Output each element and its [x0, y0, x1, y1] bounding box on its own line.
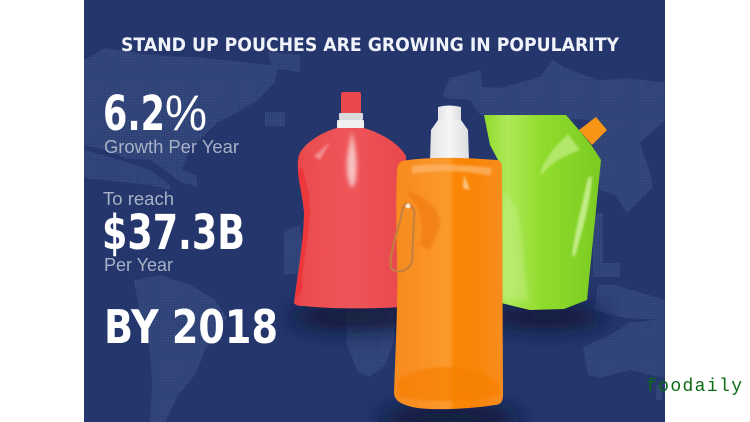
stat: growth per year: 6.2	[103, 86, 165, 142]
icon: green pouch	[484, 115, 607, 310]
icon: orange pouch with carabiner	[391, 106, 503, 409]
stat: market value	[102, 189, 245, 275]
title: STAND UP POUCHES ARE GROWING IN POPULARITY	[121, 35, 620, 56]
stat: growth per year	[103, 85, 239, 157]
stat: market value: $37.3B	[102, 205, 245, 261]
stat: target year: BY 2018	[104, 300, 278, 354]
stat: market value: To reach	[103, 189, 174, 209]
icon: red pouch	[294, 92, 406, 308]
stat: growth per year: %	[165, 85, 207, 141]
stat: growth per year: Growth Per Year	[104, 137, 239, 157]
world map	[84, 48, 665, 422]
pouch shadows	[289, 304, 605, 422]
watermark: foodaily: foodaily	[646, 377, 742, 397]
panel: navy background	[84, 0, 665, 422]
stat: market value: Per Year	[104, 255, 173, 275]
